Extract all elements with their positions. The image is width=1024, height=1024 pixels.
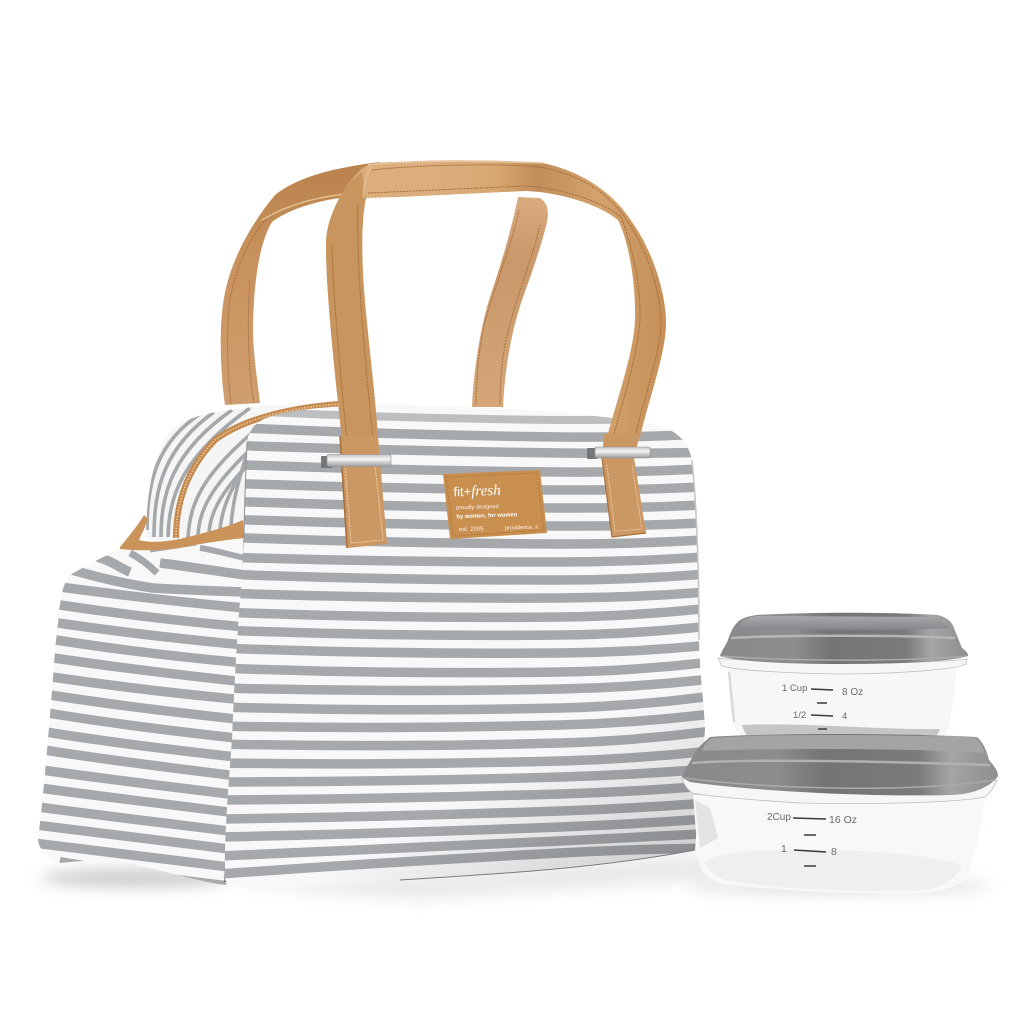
large container markings: 1 — [781, 843, 787, 855]
back handle right — [472, 197, 548, 407]
small container markings: 1/2 — [793, 710, 806, 721]
small container markings: 1 Cup — [782, 683, 807, 694]
est year: est. 2005 — [459, 526, 484, 533]
large container markings: 2Cup — [767, 812, 791, 823]
large container body — [693, 795, 985, 894]
small container markings: 4 — [842, 711, 847, 722]
tagline: proudly designed — [456, 504, 499, 511]
floor shadows — [40, 853, 990, 900]
large container markings: 8 — [831, 846, 837, 858]
large container markings — [767, 812, 857, 866]
large container rim — [682, 778, 997, 804]
large container markings: 16 Oz — [829, 814, 857, 826]
small container body — [728, 668, 957, 748]
small container — [718, 613, 968, 748]
front panel — [220, 405, 720, 900]
right strap tab — [602, 434, 646, 537]
zipper — [176, 404, 338, 538]
top zip panel — [146, 403, 342, 542]
large lid — [682, 734, 998, 795]
left metal clasp — [321, 454, 391, 468]
small container markings — [782, 683, 863, 729]
pocket seam shadow — [225, 540, 244, 882]
small container markings: 8 Oz — [842, 687, 863, 698]
front handle — [326, 160, 666, 440]
left strap tab — [340, 436, 387, 548]
pocket trim — [120, 515, 245, 550]
side pocket — [34, 535, 246, 886]
tagline bold: by women, for women — [456, 512, 518, 520]
back handle left — [221, 162, 380, 405]
large container — [682, 734, 998, 894]
brand name: fit+fresh — [453, 483, 501, 500]
pocket stripes — [34, 543, 245, 886]
front stripes — [220, 410, 720, 900]
product illustration — [38, 160, 998, 902]
small lid — [720, 613, 968, 664]
small container rim — [718, 658, 967, 674]
right metal clasp — [587, 447, 650, 459]
label patch — [443, 470, 547, 539]
location: providence, ri — [505, 525, 539, 532]
